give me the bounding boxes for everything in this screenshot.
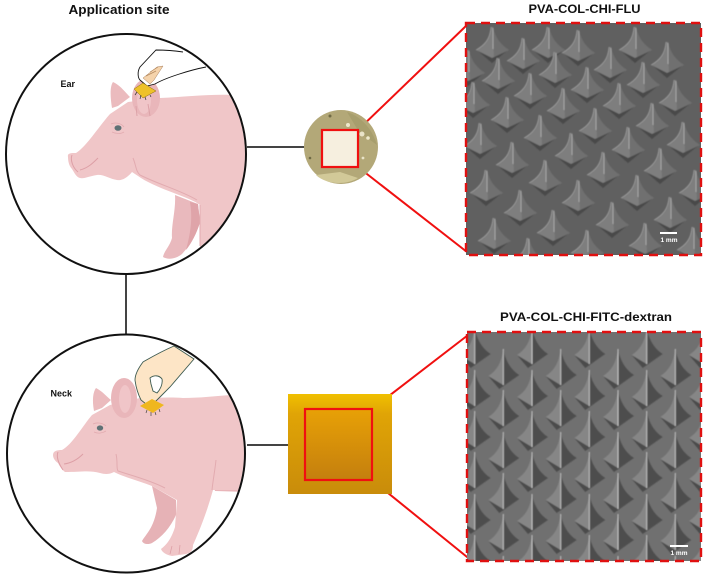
panel: ear application circle (6, 34, 252, 274)
label: neck: Neck (50, 388, 73, 398)
scale bar: 1 mm (670, 545, 688, 557)
highlighted square on patch (305, 409, 372, 480)
connector: ear circle to disc (247, 146, 305, 148)
connector: between circles (125, 272, 127, 335)
title: application site: Application site (68, 2, 170, 17)
zoom lines: patch to lower micrograph (372, 332, 472, 561)
front leg (163, 195, 200, 259)
microneedle disc photo (304, 110, 378, 184)
illustration: pig with neck patch (53, 346, 252, 556)
scale bar: 1 mm (660, 232, 678, 244)
heading: lower micrograph: PVA-COL-CHI-FITC-dextran (500, 310, 672, 324)
highlighted square on disc (322, 130, 358, 167)
scale bar: 1 mm: 1 mm (671, 550, 688, 557)
icon: hand holding patch (135, 346, 194, 416)
icon: hand holding patch (134, 50, 206, 100)
scale bar: 1 mm: 1 mm (661, 237, 678, 244)
label: ear: Ear (60, 79, 76, 89)
micrograph: PVA-COL-CHI-FITC-dextran (466, 330, 702, 562)
microneedle patch photo (288, 394, 392, 494)
far front leg (142, 486, 176, 544)
illustration: pig with ear patch (68, 50, 252, 259)
panel: neck application circle (7, 334, 252, 572)
zoom lines: disc to upper micrograph (358, 25, 467, 252)
heading: upper micrograph: PVA-COL-CHI-FLU (528, 2, 640, 16)
connector: neck circle to patch (247, 444, 288, 446)
micrograph: PVA-COL-CHI-FLU (464, 22, 702, 256)
